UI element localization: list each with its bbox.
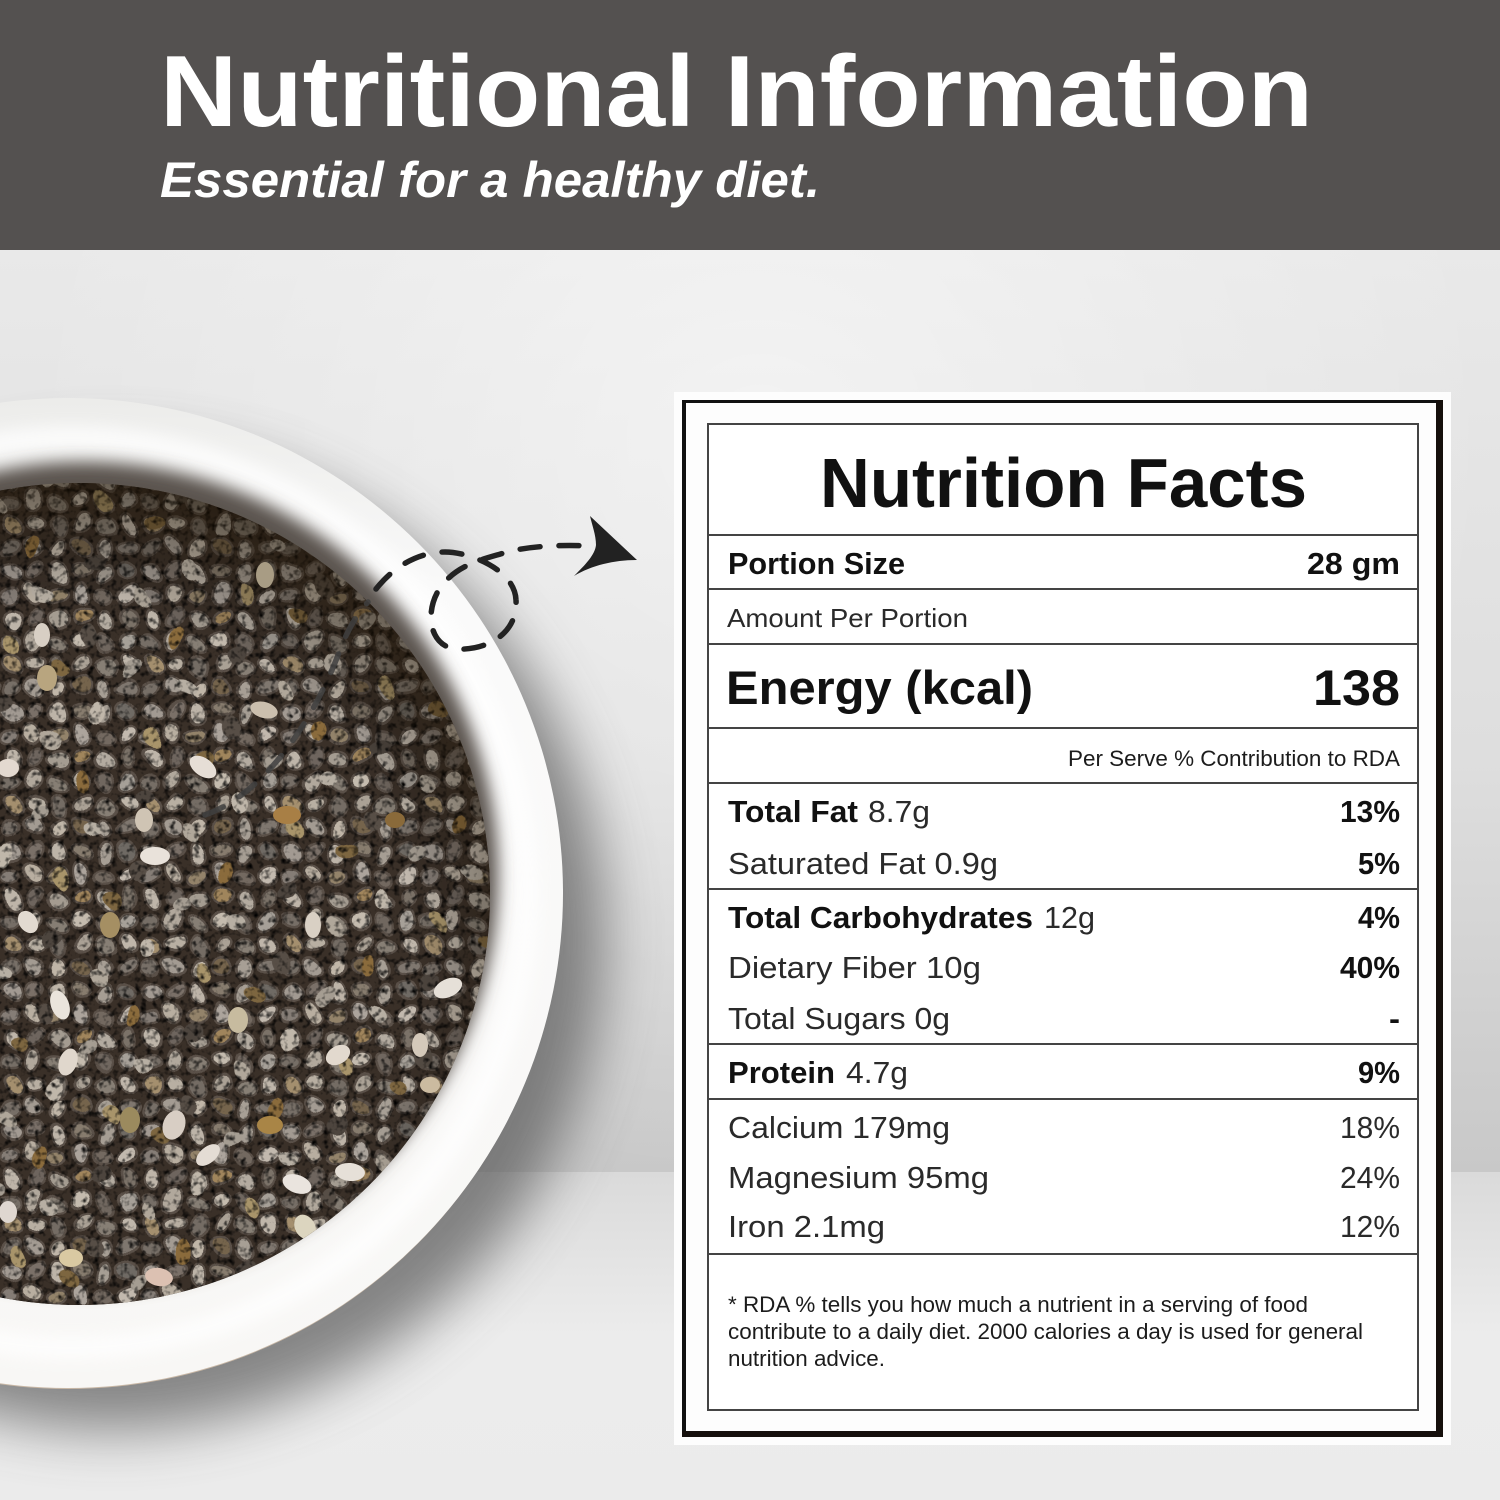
- footnote: contribute to a daily diet. 2000 calories a day is used for general: [728, 1319, 1363, 1344]
- row: total sugars: [728, 1001, 1400, 1036]
- row: portion size: 28 gm: [1307, 546, 1400, 581]
- pale seeds: [0, 562, 465, 1288]
- chia seeds: [0, 470, 500, 1320]
- row: calcium: Calcium 179mg: [728, 1110, 950, 1145]
- title: Nutritional Information: [160, 36, 1313, 148]
- row: dietary fiber: 40%: [1340, 950, 1400, 985]
- row: total fat: Total Fat: [728, 794, 858, 829]
- row: portion size: Portion Size: [728, 546, 905, 581]
- row: total carbohydrates: 4%: [1358, 900, 1400, 935]
- row: saturated fat: [728, 846, 1400, 881]
- nutrition facts panel: [674, 392, 1451, 1445]
- row: iron: Iron 2.1mg: [728, 1209, 885, 1244]
- dashed line over seeds: [205, 602, 368, 815]
- row: protein: [728, 1055, 1400, 1090]
- table frame and rules: [708, 424, 1418, 1410]
- row: total fat: [728, 794, 1400, 829]
- white backdrop: [674, 392, 1451, 1445]
- dashed loop and tail: [376, 546, 594, 649]
- footnote: nutrition advice.: [728, 1346, 885, 1371]
- row: saturated fat: Saturated Fat 0.9g: [728, 846, 998, 881]
- row: total sugars: -: [1389, 1001, 1400, 1036]
- footnote: * RDA % tells you how much a nutrient in a serving of food: [728, 1292, 1308, 1317]
- row: iron: 12%: [1340, 1209, 1400, 1244]
- row: protein: Protein: [728, 1055, 835, 1090]
- row: iron: [728, 1209, 1400, 1244]
- row: magnesium: 24%: [1340, 1160, 1400, 1195]
- row: calcium: 18%: [1340, 1110, 1400, 1145]
- bowl of chia seeds: [0, 398, 604, 1430]
- row: total sugars: Total Sugars 0g: [728, 1001, 950, 1036]
- row: total carbohydrates: 12g: [1044, 900, 1095, 935]
- row: rda header: Per Serve % Contribution to RDA: [1068, 746, 1400, 771]
- row: total fat: 13%: [1340, 794, 1400, 829]
- row: portion size: [728, 546, 1400, 581]
- row: total carbohydrates: Total Carbohydrates: [728, 900, 1033, 935]
- row: dietary fiber: [728, 950, 1400, 985]
- row: energy: [726, 660, 1400, 716]
- footnote: [728, 1292, 1363, 1371]
- row: amount per portion: Amount Per Portion: [727, 603, 968, 633]
- bowl rim: [0, 398, 563, 1389]
- subtitle: Essential for a healthy diet.: [160, 152, 820, 208]
- outer frame: [682, 400, 1443, 1437]
- heading: nutrition facts: Nutrition Facts: [820, 444, 1307, 522]
- bowl shadow: [0, 446, 604, 1430]
- row: total carbohydrates: [728, 900, 1400, 935]
- row: calcium: [728, 1110, 1400, 1145]
- row: magnesium: [728, 1160, 1400, 1195]
- row: total fat: 8.7g: [868, 794, 930, 829]
- dashed arrow from seeds to nutrition label: [205, 516, 637, 815]
- row: saturated fat: 5%: [1358, 846, 1400, 881]
- row: energy: 138: [1313, 660, 1400, 716]
- header band: [0, 0, 1500, 250]
- row: energy: Energy (kcal): [726, 661, 1033, 714]
- arrow head: [574, 516, 637, 576]
- row: dietary fiber: Dietary Fiber 10g: [728, 950, 981, 985]
- row: magnesium: Magnesium 95mg: [728, 1160, 989, 1195]
- row: protein: 9%: [1358, 1055, 1400, 1090]
- row: protein: 4.7g: [846, 1055, 908, 1090]
